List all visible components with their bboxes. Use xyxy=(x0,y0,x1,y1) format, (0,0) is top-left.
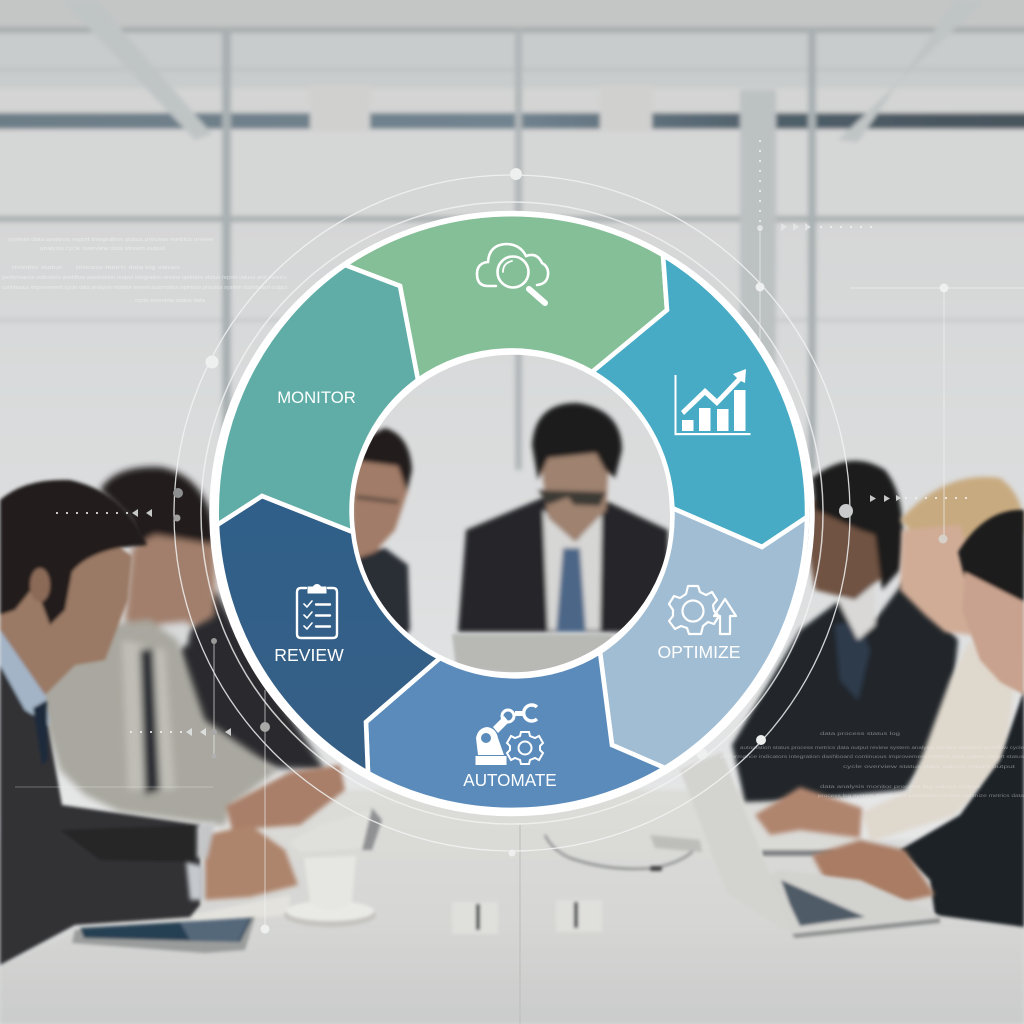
inner orbit ring xyxy=(201,202,823,824)
guide lines xyxy=(15,228,1024,929)
small overlay data text, right: performance indicators integration dashboard continuous improvement metrics data values report status xyxy=(720,754,1024,759)
segment: measure, blue-teal xyxy=(592,255,807,547)
label: review: REVIEW xyxy=(274,645,344,665)
person: woman in foreground xyxy=(900,510,1024,927)
person: foreground man xyxy=(0,480,200,965)
thin orbit rings and data overlay xyxy=(15,140,1024,929)
arrow tick marks xyxy=(132,223,901,736)
icon: gear with up arrow xyxy=(669,586,736,634)
orbit node dots xyxy=(173,168,948,934)
person: man behind right xyxy=(732,461,958,802)
laptop, right xyxy=(680,752,940,938)
segment: optimize, light blue xyxy=(600,508,807,768)
person: blonde woman xyxy=(862,477,1024,842)
papers and pens on table xyxy=(190,808,860,934)
small overlay data text, left: continuous improvement cycle data analysis monitor review automation optimize process system dashboard output xyxy=(2,285,288,291)
label: optimize: OPTIMIZE xyxy=(657,642,741,662)
ring white rim xyxy=(212,214,812,814)
icon: cloud with magnifier xyxy=(477,244,548,303)
dotted guide lines xyxy=(56,140,968,732)
small overlay data text, left: cycle overview status data xyxy=(135,298,205,304)
meeting table xyxy=(0,790,1024,1024)
small overlay data text, left: analysis cycle overview data stream output xyxy=(40,246,166,252)
small overlay data text, right: data process status log xyxy=(820,731,901,736)
person: second man in grey jacket xyxy=(35,467,278,826)
coffee cup xyxy=(284,856,376,927)
icon: robot arm with gear xyxy=(476,705,543,765)
label: monitor: MONITOR xyxy=(277,388,356,407)
person seen through the ring: left man xyxy=(352,428,412,645)
small overlay data text, left xyxy=(2,237,288,304)
tablet xyxy=(72,917,255,953)
small overlay data text, right: cycle overview status data values report output xyxy=(843,764,1016,769)
laptop in centre xyxy=(452,634,612,676)
small overlay data text, right: automation status process metrics data output review system analysis monitor optimize workflow cycle xyxy=(740,745,1024,750)
small overlay data text, right xyxy=(720,731,1024,798)
segment: analyze, green xyxy=(345,214,667,380)
process ring xyxy=(212,214,812,814)
segment: monitor, teal xyxy=(217,265,418,532)
small overlay data text, right: data analysis monitor process log values output xyxy=(820,784,981,789)
small overlay data text, left: process metric data log values xyxy=(76,265,181,271)
ring inner rim xyxy=(352,353,673,674)
icon: clipboard checklist xyxy=(297,584,337,638)
hands and cuffs, left group xyxy=(186,765,345,900)
segment: automate, medium blue xyxy=(366,652,665,810)
icon: growth chart xyxy=(674,369,750,435)
table seam xyxy=(519,825,521,1024)
hands, right group xyxy=(755,787,935,907)
outer orbit ring xyxy=(174,175,850,851)
person seen through the ring: centre man xyxy=(458,403,668,632)
small overlay data text, left: performance indicators workflow automation output integration review optimize status report values and metrics xyxy=(2,275,288,281)
small overlay data text, left: system data analysis report integration status process metrics review xyxy=(8,237,214,243)
small overlay data text, right: process log system dashboard automation review optimize metrics data xyxy=(818,793,1024,798)
segment: review, dark blue xyxy=(217,496,440,773)
label: automate: AUTOMATE xyxy=(463,771,557,790)
person: third man dark suit, left xyxy=(178,590,325,770)
small overlay data text, left: monitor status xyxy=(12,265,63,271)
